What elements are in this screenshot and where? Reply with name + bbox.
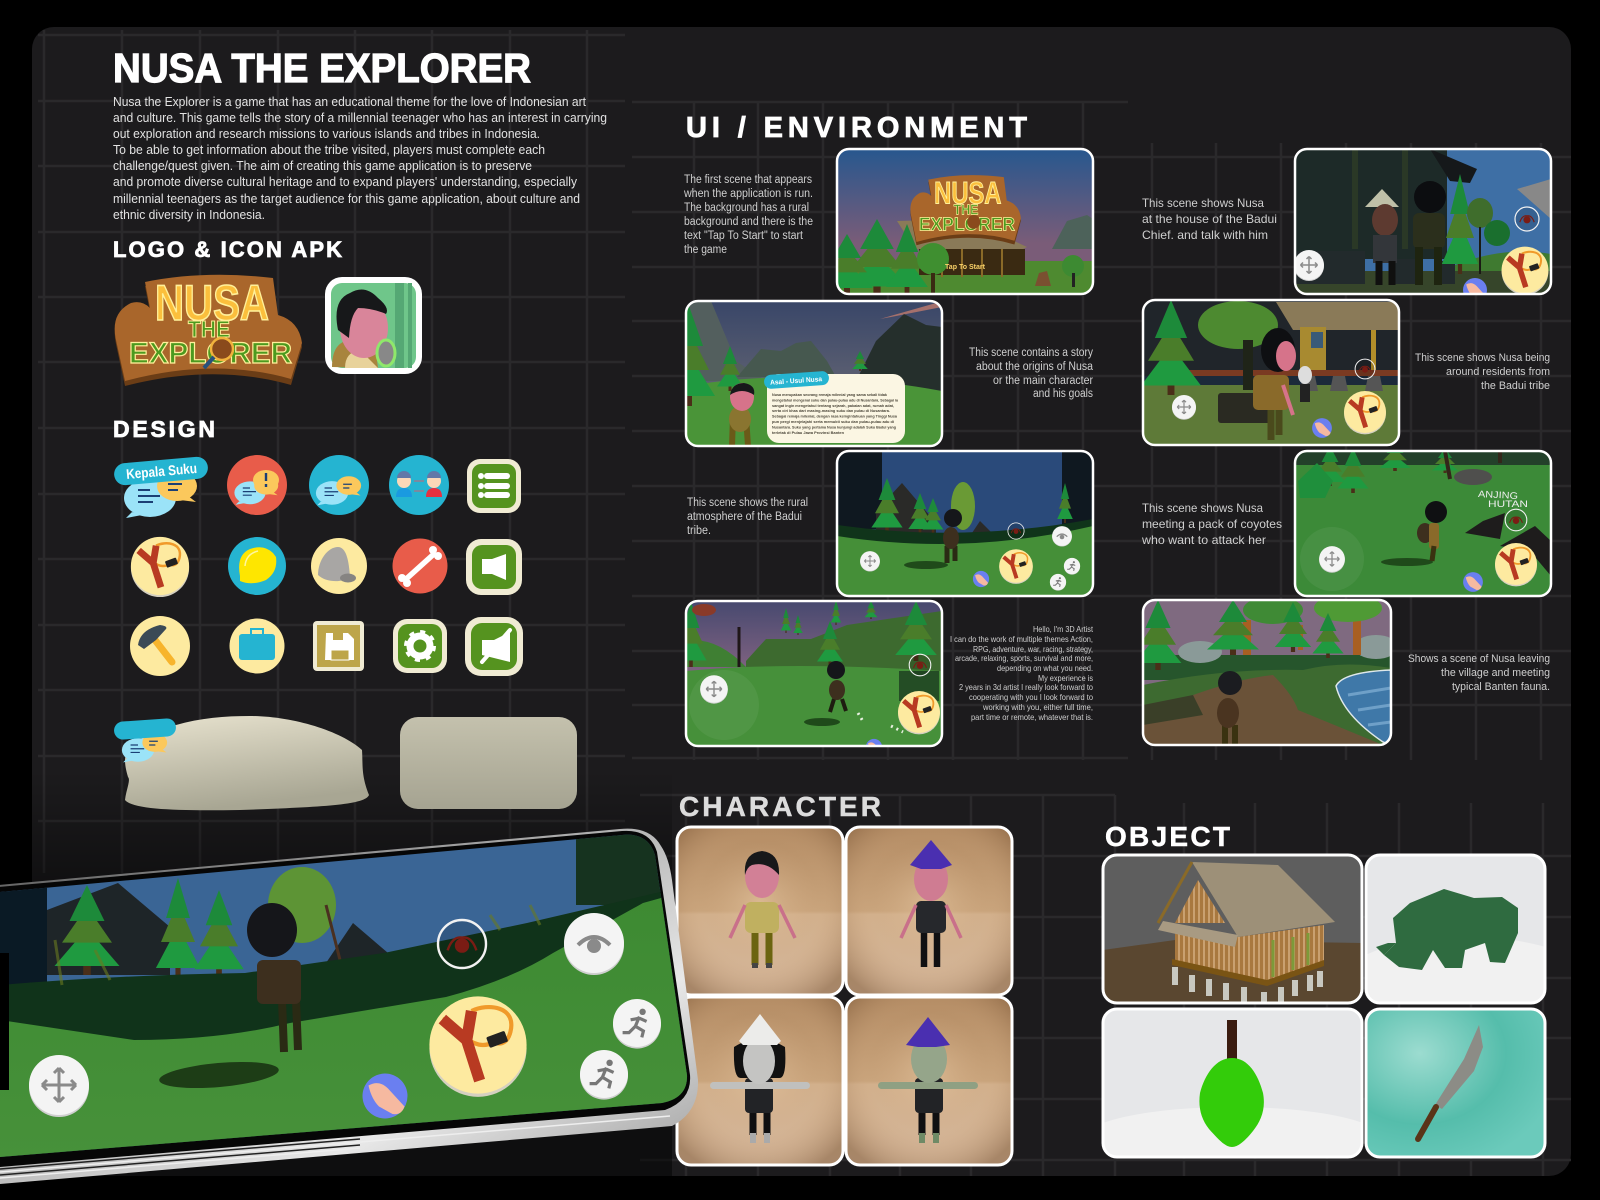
control: eye button — [564, 913, 624, 975]
caption: Banten fauna — [1408, 653, 1550, 693]
caption: rural atmosphere: tribe. — [687, 525, 711, 537]
screenshot: story scene: mengetahui mengenai suku dan pulau-pulau adu di Nusantara. Sebagai ia — [772, 398, 899, 402]
caption: Badui chief: at the house of the Badui — [1142, 212, 1277, 226]
caption: residents: This scene shows Nusa being — [1415, 352, 1550, 364]
screenshot: story scene: serta ciri khas dari masing-masing suku dan pulau di Nusantara. — [772, 409, 890, 413]
icon: chat Kepala Suku — [113, 456, 209, 518]
text block: intro: To be able to get information about the tribe visited, players must complete each — [113, 143, 545, 157]
text block: intro: ethnic diversity in Indonesia. — [113, 208, 265, 222]
heading: character: CHARACTER — [679, 791, 881, 822]
caption: first scene: when the application is run. — [683, 188, 813, 200]
phone screen scene — [0, 830, 700, 1160]
screenshot: coyotes scene: HUTAN — [1488, 499, 1528, 510]
icon: mute button — [465, 617, 523, 676]
caption: story scene: or the main character — [993, 375, 1093, 387]
caption: Banten fauna: Shows a scene of Nusa leaving — [1408, 653, 1550, 665]
caption: 3D artist note — [950, 625, 1094, 722]
heading: UI environment: UI / ENVIRONMENT — [686, 112, 1027, 144]
caption: rural atmosphere: This scene shows the rural — [687, 497, 808, 509]
caption: story scene: This scene contains a story — [969, 347, 1093, 359]
heading: design: DESIGN — [113, 416, 215, 442]
control: run button — [580, 1050, 628, 1100]
icon: menu button — [467, 459, 521, 513]
icon: trade people — [389, 455, 449, 515]
control: move joystick — [29, 1055, 89, 1117]
screenshot: story scene: Sebagai remaja milenial, dengan rasa keingintahuan yang Tinggi Nusa — [772, 415, 898, 419]
control: aim reticle — [438, 920, 486, 968]
screenshot: coyotes scene: ANJING — [1478, 489, 1518, 502]
title: NUSA THE EXPLORER — [113, 45, 531, 91]
logo: wooden sign: NUSA — [155, 275, 269, 331]
text block: intro: and promote diverse cultural heritage and to expand players' understanding, especially — [113, 175, 578, 189]
caption: Badui chief: This scene shows Nusa — [1142, 196, 1264, 210]
caption: first scene — [683, 174, 813, 256]
phone mockup — [0, 829, 700, 1184]
caption: 3D artist note: working with you, either full time, — [982, 703, 1093, 712]
text block: intro — [113, 95, 607, 222]
screenshot: story scene: pun pergi menjelajahi serta memukti suku dan pulau-pulau adu di — [772, 420, 894, 424]
icon: sound button — [466, 539, 522, 595]
icon: gear button — [393, 619, 447, 673]
screenshot: title screen: Tap To Start — [945, 262, 985, 271]
caption: first scene: background and there is the — [684, 216, 813, 228]
caption: first scene: the game — [684, 244, 727, 256]
text block: intro: out exploration and research missions to various islands and tribes in Indonesia. — [113, 127, 540, 141]
caption: 3D artist note: part time or remote, whatever that is. — [971, 713, 1093, 722]
caption: 3D artist note: My experience is — [1038, 674, 1093, 683]
screenshot: story scene: sangat ingin mengetahui tentang sejarah, pakaian adat, rumah adat, — [772, 404, 894, 408]
icon: save button — [313, 621, 364, 671]
caption: coyotes: This scene shows Nusa — [1142, 501, 1263, 515]
caption: 3D artist note: RPG, adventure, war, racing, strategy, — [973, 645, 1093, 654]
screenshot: hills scene — [675, 600, 942, 755]
caption: rural atmosphere: atmosphere of the Badui — [687, 511, 802, 523]
screenshot: residents scene — [1141, 300, 1399, 445]
card: green villager character — [846, 997, 1012, 1165]
screenshot: Banten fauna scene — [1135, 594, 1398, 745]
text block: intro: Nusa the Explorer is a game that has an educational theme for the love of Indonesian art — [113, 95, 587, 109]
caption: first scene: The background has a rural — [684, 202, 809, 214]
screenshot: title screen — [821, 149, 1093, 294]
caption: first scene: text "Tap To Start" to start — [684, 230, 804, 242]
icon: lemon — [228, 537, 286, 595]
card: machete — [1366, 1009, 1545, 1157]
caption: 3D artist note: 2 years in 3d artist I really look forward to — [959, 683, 1093, 692]
icon: chat — [309, 455, 369, 515]
card: Badui house — [1103, 855, 1362, 1003]
caption: coyotes — [1141, 501, 1282, 547]
control: grab hand — [362, 1074, 408, 1118]
text block: intro: challenge/quest given. The aim of creating this game application is to preserve — [113, 159, 532, 173]
caption: 3D artist note: Hello, I'm 3D Artist — [1033, 625, 1094, 634]
screenshot: story scene: terletak di Pulau Jawa Provinsi Banten — [772, 431, 844, 435]
caption: 3D artist note: I can do the work of multiple themes Action, — [950, 635, 1093, 644]
icon: rock — [311, 538, 367, 594]
panel: rounded dialog background — [400, 717, 577, 809]
card: rhino — [1364, 854, 1546, 1004]
card: white villager character — [677, 997, 843, 1165]
caption: coyotes: who want to attack her — [1141, 533, 1266, 547]
caption: coyotes: meeting a pack of coyotes — [1142, 517, 1282, 531]
text block: intro: and culture. This game tells the story of a millennial teenager who has an interest in carrying — [113, 111, 607, 125]
icon: small chat on cloud — [113, 718, 177, 762]
phone body — [0, 829, 698, 1184]
card: chief character — [846, 827, 1012, 995]
caption: 3D artist note: arcade, relaxing, sports, survival and more, — [955, 654, 1093, 663]
screenshot: story scene: Nusantara. Suku yang pertama Nusa kunjungi adalah Suku Badui yang — [772, 425, 896, 429]
control: slingshot button — [429, 996, 527, 1097]
screenshot: title screen: NUSA — [934, 176, 1001, 211]
caption: 3D artist note: depending on what you need. — [997, 664, 1093, 673]
icon: hammer — [130, 616, 190, 676]
card: Nusa character — [677, 827, 843, 995]
screenshot: coyotes scene — [1295, 441, 1551, 596]
caption: Badui chief — [1142, 196, 1277, 242]
screenshot: title screen: EXPLORER — [919, 213, 1015, 235]
icon: slingshot — [131, 537, 189, 597]
caption: Banten fauna: the village and meeting — [1441, 667, 1550, 679]
heading: logo and icon: LOGO & ICON APK — [113, 237, 342, 262]
caption: residents: the Badui tribe — [1481, 380, 1550, 392]
logo: wooden sign: EXPLORER — [129, 337, 292, 370]
caption: residents — [1415, 352, 1550, 392]
panel: cloud dialog background — [125, 716, 369, 810]
caption: first scene: The first scene that appears — [684, 174, 812, 186]
text block: intro: millennial teenagers as the target audience for this game application, about culture and — [113, 192, 580, 206]
icon: chat Kepala Suku: Kepala Suku — [125, 460, 198, 482]
caption: story scene: and his goals — [1033, 388, 1093, 400]
icon: app icon — [325, 277, 422, 374]
caption: 3D artist note: cooperating with you I look forward to — [969, 693, 1093, 702]
icon: bone — [392, 538, 448, 594]
screenshot: chief's house — [1294, 149, 1551, 302]
logo: wooden sign — [115, 275, 302, 386]
card: green fruit — [1102, 1008, 1364, 1158]
caption: residents: around residents from — [1446, 366, 1550, 378]
caption: story scene: about the origins of Nusa — [976, 361, 1094, 373]
icon: alert chat — [227, 455, 287, 515]
caption: Banten fauna: typical Banten fauna. — [1452, 681, 1550, 693]
logo: wooden sign: THE — [188, 316, 230, 342]
screenshot: story scene — [663, 301, 942, 446]
icon: suitcase — [230, 618, 284, 674]
screenshot: story scene: Asal - Usul Nusa — [770, 376, 822, 387]
caption: story scene — [969, 347, 1094, 400]
control: jump button — [613, 999, 661, 1049]
screenshot: rural scene — [837, 451, 1093, 596]
screenshot: story scene: Nusa merupakan seorang remaja milenial yang sama sekali tidak — [772, 393, 887, 397]
screenshot: title screen: THE — [954, 201, 978, 217]
heading: object: OBJECT — [1105, 821, 1230, 852]
caption: rural atmosphere — [687, 497, 808, 537]
caption: Badui chief: Chief. and talk with him — [1142, 228, 1268, 242]
